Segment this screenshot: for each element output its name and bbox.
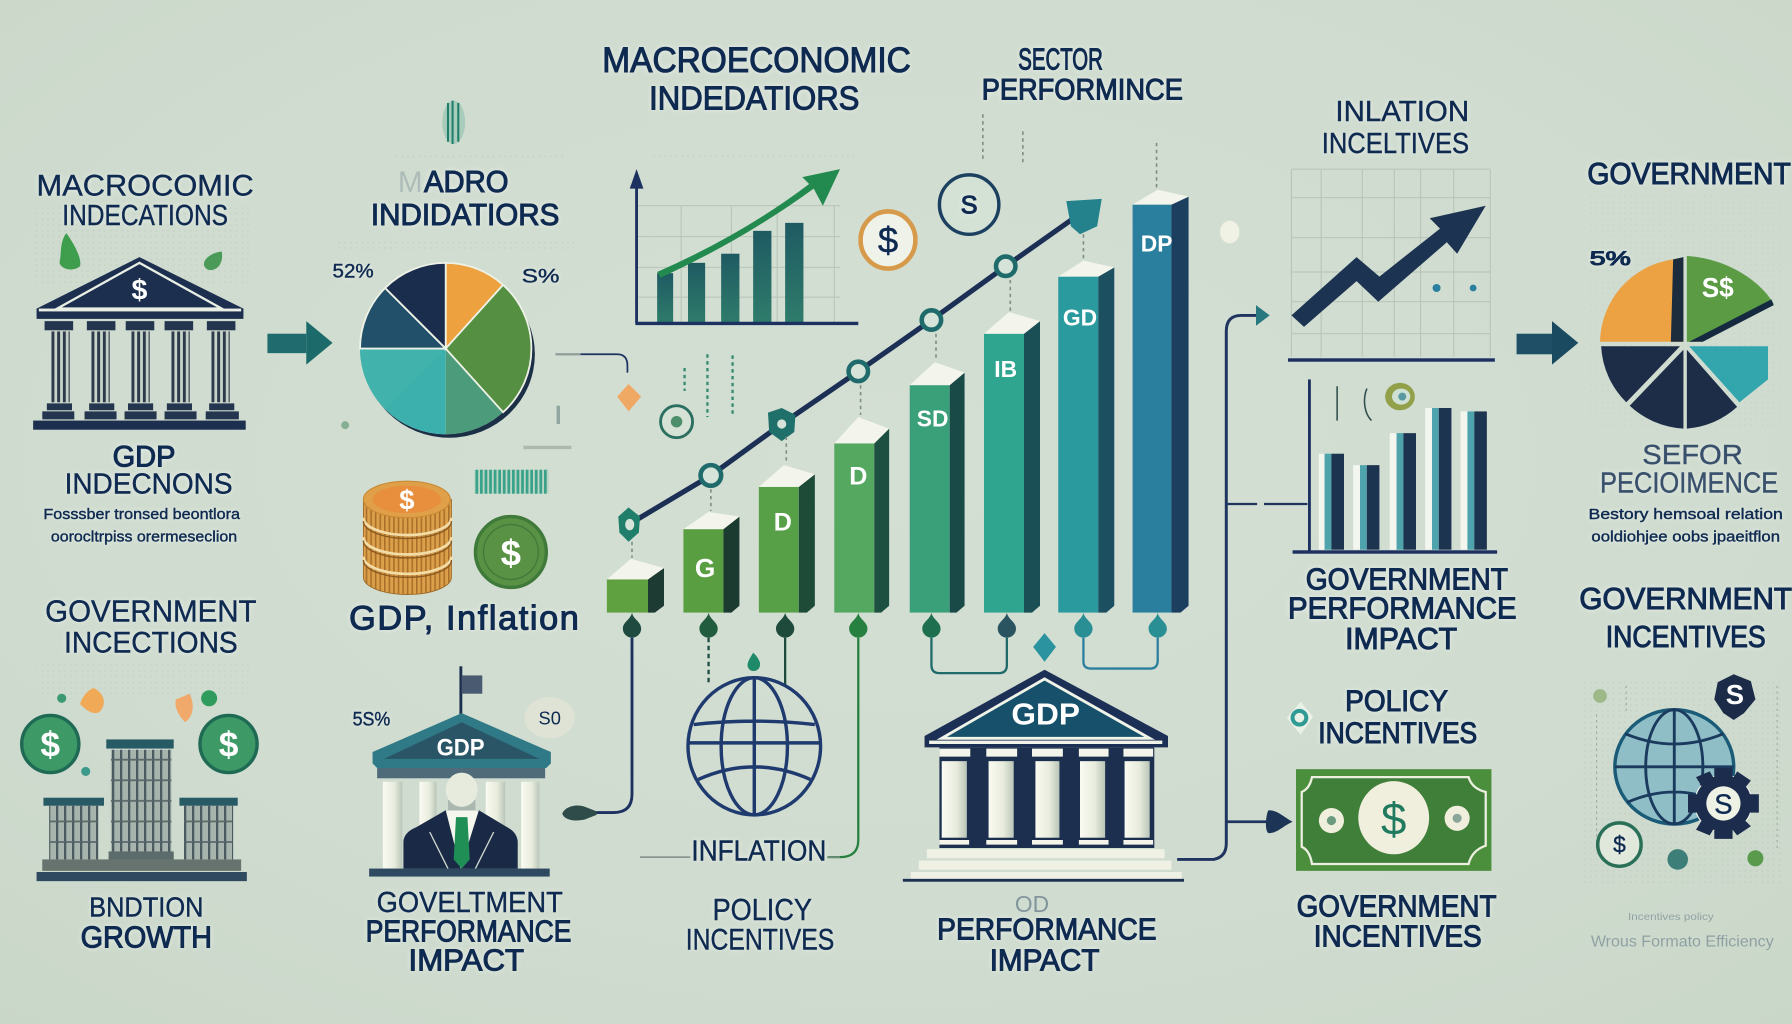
label: inflation: INFLATION <box>691 836 826 868</box>
bar 7: GD <box>1063 305 1097 331</box>
dashed connectors above bars <box>632 114 1157 558</box>
small captions around pie <box>338 353 581 451</box>
label: performance impact <box>937 911 1157 977</box>
pie chart <box>360 263 535 438</box>
heading: macrocomic indecations <box>37 169 254 232</box>
bar 2 <box>683 512 739 613</box>
icon: small teal emblem <box>442 101 465 144</box>
icon: gdp temple: GDP <box>1011 697 1080 732</box>
icon: small coin: $ <box>1613 832 1626 858</box>
label: faded od: OD <box>1015 891 1049 917</box>
label: government performance impact <box>1288 562 1517 656</box>
label: policy incentives: INCENTIVES <box>686 924 834 957</box>
icon: small round emblem <box>661 406 693 438</box>
heading: government incentives: INCENTIVES <box>1606 619 1766 654</box>
label: endtion growth: GROWTH <box>81 919 212 954</box>
label: government incentives: GOVERNMENT <box>1297 889 1497 924</box>
label: government incentives: INCENTIVES <box>1314 918 1482 953</box>
heading: sector performance <box>982 42 1183 106</box>
label: gdp indecnons <box>65 440 233 501</box>
bar 8 <box>1133 190 1189 613</box>
heading: inlation incetives: INCELTIVES <box>1322 128 1469 160</box>
text block: faded footer <box>1591 912 1774 950</box>
icon: dollar coin right: $ <box>219 725 239 765</box>
label: 5s percent: 5S% <box>353 709 390 731</box>
panel: macro indications pie <box>333 101 581 638</box>
label: gdp indecnons: GDP <box>113 440 175 473</box>
bar 3 <box>759 465 815 613</box>
icon: small coin <box>1598 823 1641 866</box>
panel: government incentives globe <box>1579 581 1792 950</box>
pie chart: S$ <box>1702 272 1734 303</box>
heading: macrocomic indecations: INDECATIONS <box>62 200 228 232</box>
bar 1 <box>607 559 664 613</box>
icon: orange dollar coin: $ <box>878 220 898 261</box>
icon: orange dollar coin <box>861 211 915 269</box>
text block: small description: oorocltrpiss orermeseclion <box>51 530 237 546</box>
panel: government performance temple <box>353 666 575 977</box>
label: policy incentives <box>686 892 834 957</box>
icon: teal marker <box>1593 689 1763 870</box>
chart: striped bar chart <box>1293 379 1497 554</box>
icon: dollar coin right <box>200 715 257 773</box>
label: endtion growth <box>81 892 212 954</box>
text block: small description: Bestory hemsoal relation <box>1589 507 1783 523</box>
label: government performance impact: IMPACT <box>1345 621 1457 656</box>
icon: navy s coin <box>939 175 999 234</box>
text block: small description <box>43 507 241 546</box>
bar 2: G <box>695 553 715 583</box>
label: setor pecioimence: SEFOR <box>1642 439 1743 470</box>
text block: faded footer: Incentives policy <box>1628 912 1715 923</box>
icon: dollar coin left <box>22 715 79 773</box>
label: government incentives <box>1297 889 1497 953</box>
icon: bank temple: $ <box>131 274 147 306</box>
heading: sector performance: SECTOR <box>1018 42 1103 77</box>
heading: madro indidations: INDIDATIORS <box>371 197 559 232</box>
dashed green markers <box>685 354 733 417</box>
icon: bank temple <box>33 257 246 430</box>
label: government performance impact: PERFORMANCE <box>366 914 571 949</box>
icon: coin stack: $ <box>399 485 414 516</box>
heading: madro indidations: M <box>398 166 423 199</box>
connector tree to right column <box>1177 221 1307 859</box>
label: 5 percent: 5% <box>1590 248 1631 270</box>
icon: navy s badge <box>1714 674 1755 720</box>
chart: zigzag arrow on grid <box>1288 169 1495 362</box>
icon: green leaves <box>59 233 222 270</box>
text block: small description <box>1589 507 1783 546</box>
bar 3: D <box>774 508 792 536</box>
icon: orange diamond <box>617 384 641 411</box>
label: government performance impact: GOVELTMENT <box>377 887 563 919</box>
label: gdp inflation: GDP, Inflation <box>349 600 579 638</box>
panel: left column top, central bank <box>33 169 254 546</box>
connector stub <box>581 354 627 373</box>
icon: navy s badge: S <box>1726 679 1744 710</box>
decorations left of bars <box>581 354 733 438</box>
heading: government incections <box>45 594 257 660</box>
heading: government incentives <box>1579 581 1792 654</box>
icon: barcode strip <box>474 470 549 494</box>
icon: outline globe <box>688 653 821 815</box>
panel: inflation incentives chart <box>1287 96 1517 953</box>
label: government performance impact: PERFORMANCE <box>1288 590 1517 625</box>
icon: flag <box>459 666 482 714</box>
bar 6: IB <box>994 356 1017 382</box>
label: policy incentives <box>1318 685 1477 750</box>
icon: gear with dollar: S <box>1714 789 1733 820</box>
label: government performance impact <box>366 887 571 977</box>
icon: coin stack <box>363 481 451 595</box>
arrow: chart to pie <box>1517 321 1578 365</box>
heading: sector performance: PERFORMINCE <box>982 73 1183 106</box>
heading: macroeconomic indedators: INDEDATIORS <box>649 81 859 118</box>
label: policy incentives: POLICY <box>1345 685 1448 718</box>
label: performance impact: PERFORMANCE <box>937 911 1157 946</box>
label: policy incentives: POLICY <box>713 892 812 927</box>
icon: small white blob <box>1220 221 1239 243</box>
label: 5 percent: S% <box>522 265 559 287</box>
chart: rising bars <box>630 169 858 323</box>
bar 4: D <box>849 463 867 491</box>
callout: s0 bubble <box>525 697 575 738</box>
trend line with nodes <box>618 199 1102 542</box>
bar 7 <box>1058 261 1114 613</box>
heading: inlation incetives <box>1322 96 1469 160</box>
heading: inlation incetives: INLATION <box>1335 96 1469 128</box>
label: 52 percent: 52% <box>333 261 374 283</box>
label: policy incentives: INCENTIVES <box>1318 717 1477 750</box>
icon: green dollar coin: $ <box>501 533 521 574</box>
heading: macroeconomic indedators <box>602 40 911 118</box>
label: endtion growth: BNDTION <box>89 892 203 923</box>
bar 4 <box>834 417 889 613</box>
heading: government incections: GOVERNMENT <box>45 594 257 629</box>
callout: s0 bubble: S0 <box>539 708 561 729</box>
chart: gdp 3d bar growth <box>562 114 1189 857</box>
icon: teal diamond <box>1033 633 1056 662</box>
heading: macrocomic indecations: MACROCOMIC <box>37 169 254 202</box>
label: government performance impact: GOVERNMENT <box>1306 562 1508 597</box>
icon: gear with dollar <box>1688 768 1759 839</box>
panel: right column pie <box>1586 156 1791 546</box>
icon: teal tag <box>1287 702 1313 735</box>
label: performance impact: IMPACT <box>990 942 1100 977</box>
icon: government buildings <box>37 739 247 881</box>
arrow: left to pie <box>267 321 333 365</box>
bar 5: SD <box>917 405 948 431</box>
label: government performance impact: IMPACT <box>409 942 524 977</box>
panel: left column bottom, government buildings <box>22 594 257 954</box>
icon: temple with official <box>369 713 551 877</box>
heading: macroeconomic indedators: MACROECONOMIC <box>602 40 911 80</box>
icon: banknote <box>1296 769 1491 871</box>
icon: dollar coin left: $ <box>40 725 60 765</box>
panel: line chart top centre <box>602 40 999 323</box>
icon: filled globe <box>1615 710 1734 824</box>
bar 8: DP <box>1141 230 1172 256</box>
icon: plug end <box>562 806 597 820</box>
heading: madro indidations: ADRO <box>424 164 509 199</box>
pie chart <box>1600 256 1774 429</box>
heading: government incections: INCECTIONS <box>64 627 238 660</box>
bar 5 <box>910 362 965 613</box>
icon: temple with official: GDP <box>437 734 485 761</box>
icon: gdp temple <box>903 670 1184 882</box>
icon: banknote: $ <box>1381 793 1406 844</box>
icon: navy s coin: S <box>961 192 978 220</box>
icon: decorative dots <box>57 688 217 776</box>
label: setor pecioimence <box>1600 439 1778 500</box>
heading: madro indidations <box>371 164 559 232</box>
drops and connector lines under bars <box>589 613 1167 857</box>
label: gdp indecnons: INDECNONS <box>65 469 233 501</box>
text block: small description: Fosssber tronsed beontlora <box>43 507 241 523</box>
text block: faded footer: Wrous Formato Efficiency <box>1591 933 1774 950</box>
bar 6 <box>984 312 1040 613</box>
icon: green dollar coin <box>475 517 546 587</box>
text block: small description: ooldiohjee oobs jpaeitflon <box>1591 530 1780 546</box>
